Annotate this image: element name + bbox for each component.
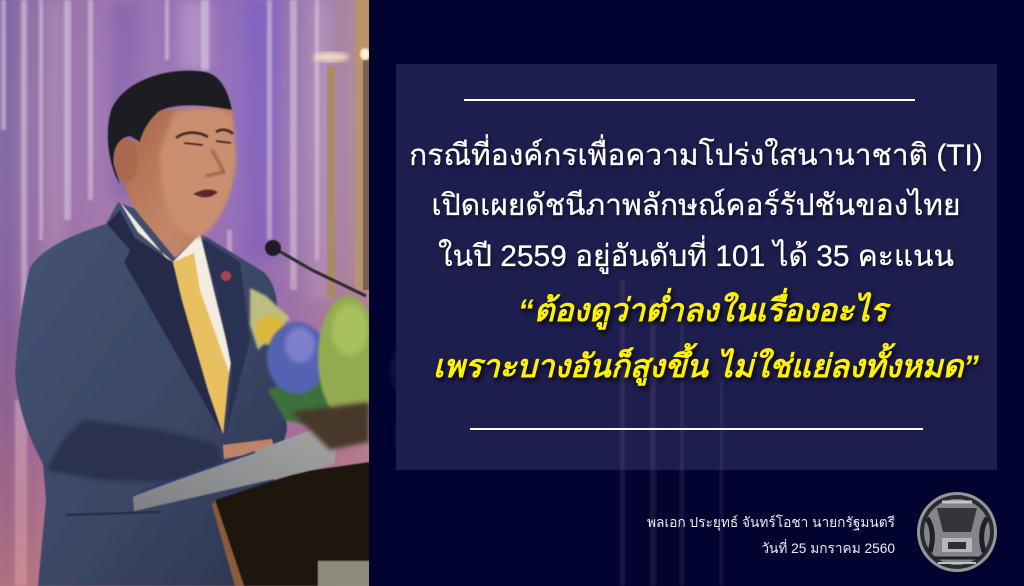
yellow quote bbox=[433, 288, 982, 391]
headline text block: เปิดเผยดัชนีภาพลักษณ์คอร์รัปชันของไทย bbox=[432, 189, 960, 222]
flowers bbox=[250, 288, 378, 450]
text panel bbox=[396, 64, 997, 470]
ear bbox=[114, 138, 138, 182]
top rule bbox=[464, 99, 915, 101]
tie bbox=[173, 253, 229, 434]
lectern body bbox=[215, 462, 370, 586]
seal emblem bbox=[917, 492, 997, 572]
headline text block bbox=[409, 134, 984, 278]
faded curtain streaks bbox=[620, 280, 723, 586]
hair bbox=[108, 71, 232, 184]
mouth bbox=[193, 189, 218, 198]
eyes and brows bbox=[176, 130, 233, 138]
signature: วันที่ 25 มกราคม 2560 bbox=[761, 541, 895, 556]
lapel left bbox=[107, 210, 224, 436]
faded flowers in background bbox=[390, 325, 600, 455]
bottom rule bbox=[470, 428, 923, 430]
photo: speaker bbox=[15, 71, 378, 586]
nose bbox=[206, 150, 224, 176]
photo: curtain backdrop bbox=[0, 0, 370, 586]
microphone bbox=[272, 247, 366, 296]
jacket bbox=[15, 202, 287, 586]
signature: พลเอก ประยุทธ์ จันทร์โอชา นายกรัฐมนตรี bbox=[647, 515, 895, 530]
dark right side bbox=[369, 0, 1024, 586]
lectern top bbox=[133, 424, 336, 511]
lapel right bbox=[202, 238, 250, 434]
forearm bbox=[47, 420, 222, 482]
yellow quote: เพราะบางอันก็สูงขึ้น ไม่ใช่แย่ลงทั้งหมด” bbox=[433, 348, 979, 384]
headline text block: ในปี 2559 อยู่อันดับที่ 101 ได้ 35 คะแนน bbox=[438, 240, 954, 273]
yellow quote: “ต้องดูว่าต่ำลงในเรื่องอะไร bbox=[518, 292, 887, 328]
pin bbox=[221, 271, 231, 281]
neck and face bbox=[122, 108, 235, 258]
photo: gold lamps bbox=[313, 0, 370, 298]
hand bbox=[223, 439, 274, 459]
pocket bbox=[66, 512, 160, 515]
shirt bbox=[120, 202, 231, 395]
signature bbox=[647, 514, 895, 556]
headline text block: กรณีที่องค์กรเพื่อความโปร่งใสนานาชาติ (TI) bbox=[409, 139, 983, 172]
